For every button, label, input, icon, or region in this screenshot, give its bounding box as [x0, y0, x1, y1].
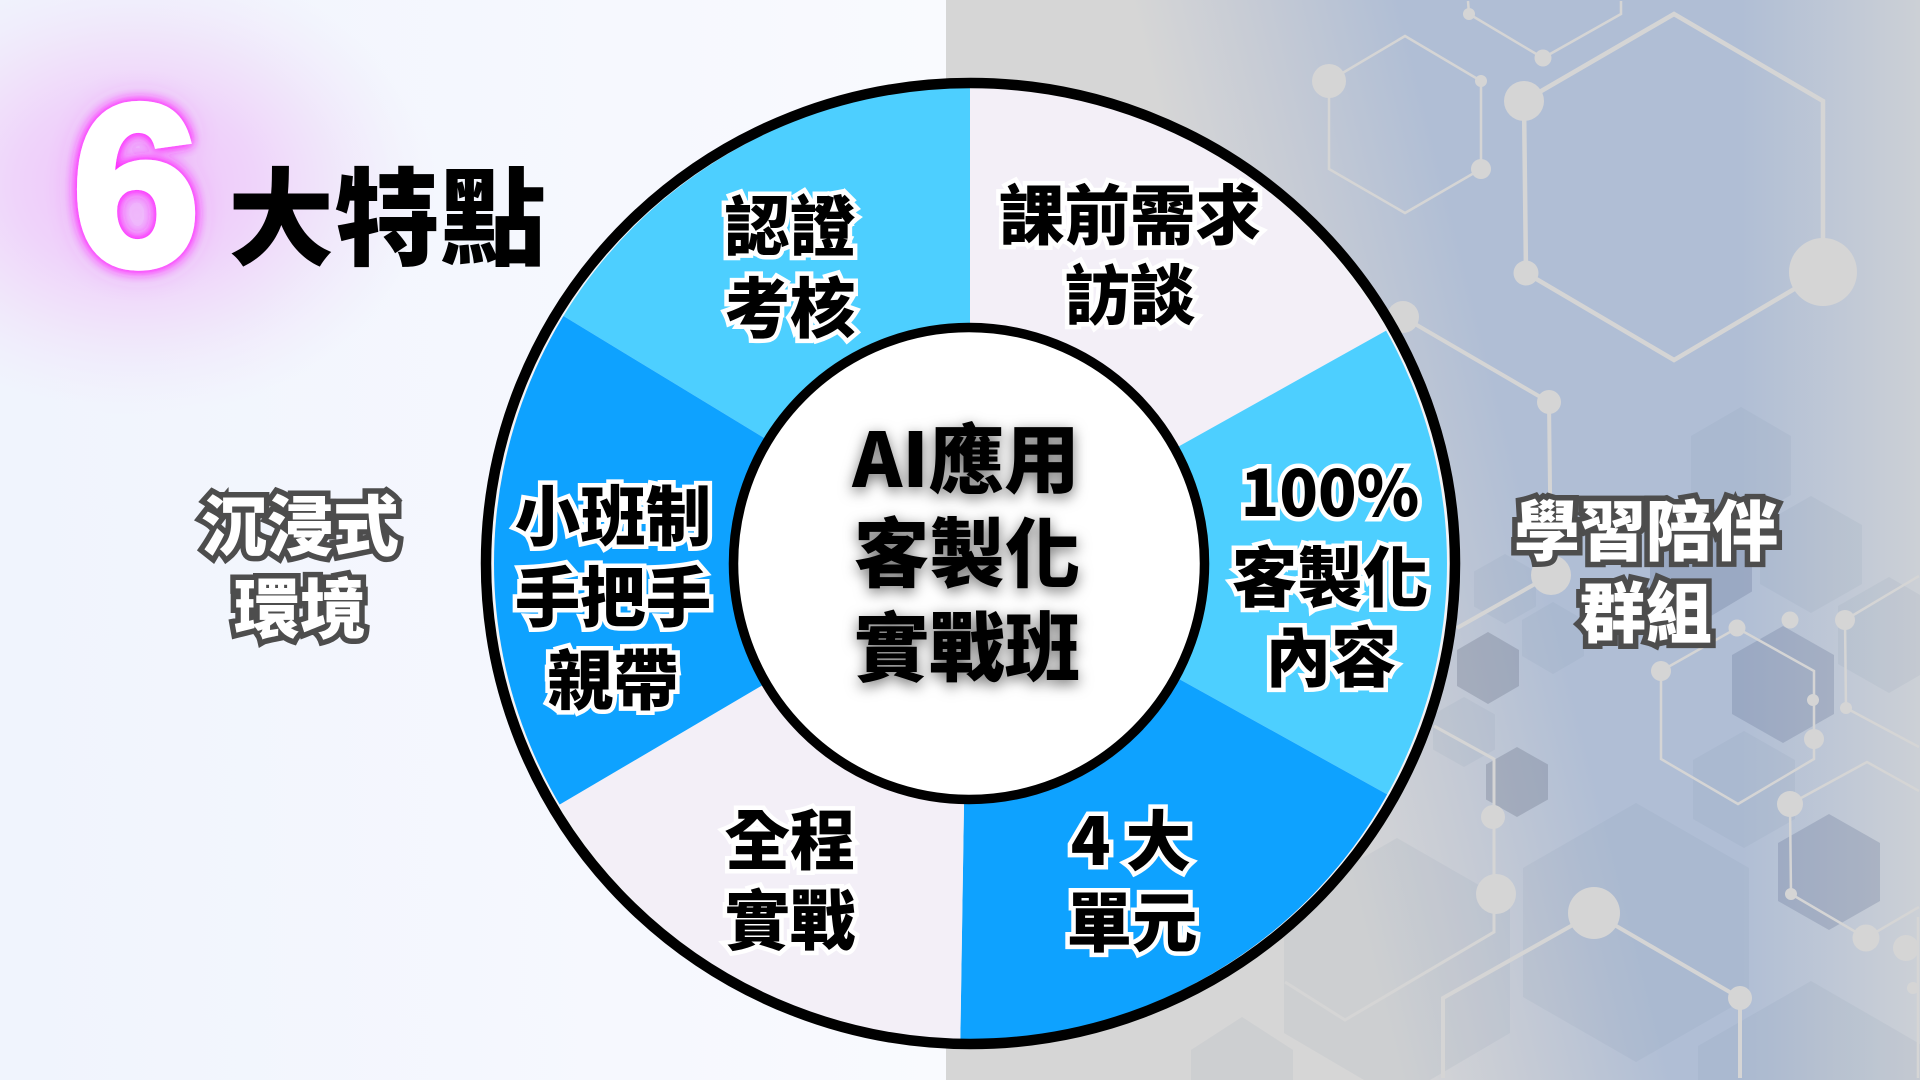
wheel segments — [494, 88, 1447, 1039]
wheel centre circle — [734, 328, 1204, 800]
segment label: 認證考核: 考核 — [724, 256, 856, 351]
title number: 6: 6 — [72, 57, 200, 314]
segment label: 全程實戰 — [724, 788, 856, 963]
segment label: 認證考核 — [724, 174, 856, 351]
title: 大特點: 大特點 — [228, 134, 546, 288]
segment label: 100%客製化內容: 內容 — [1265, 605, 1397, 700]
segment label: 課前需求訪談: 課前需求 — [999, 163, 1261, 258]
segment label: 小班制手把手親帶: 親帶 — [547, 628, 679, 723]
wheel light edge — [490, 87, 1450, 1040]
right background panel — [946, 0, 1920, 1080]
segment label: 認證考核: 認證 — [724, 174, 856, 269]
segment label: 小班制手把手親帶 — [515, 464, 711, 723]
wheel — [440, 70, 1500, 1060]
segment label: 4大單元 — [1066, 789, 1198, 965]
side label: 學習陪伴群組: 學習陪伴 — [1514, 479, 1778, 575]
side label: 沉浸式環境: 沉浸式 — [201, 474, 399, 570]
side label: 沉浸式環境: 環境 — [234, 557, 366, 653]
centre label: AI應用客製化實戰班: 實戰班 — [854, 587, 1080, 697]
side label: 學習陪伴群組 — [1514, 479, 1778, 657]
hexagon tile pattern — [1191, 407, 1920, 1080]
segment label: 全程實戰: 全程 — [724, 788, 856, 883]
side label: 學習陪伴群組: 群組 — [1580, 561, 1712, 657]
title glow halo — [0, 0, 435, 415]
molecule network lines and nodes — [1285, 1, 1919, 1078]
left background panel — [0, 0, 946, 1080]
segment label: 100%客製化內容: 100% — [1241, 443, 1419, 535]
segment label: 全程實戰: 實戰 — [724, 868, 856, 963]
centre label: AI應用客製化實戰班 — [851, 399, 1080, 697]
segment label: 小班制手把手親帶: 小班制 — [515, 464, 711, 559]
segment label: 課前需求訪談 — [999, 163, 1261, 338]
segment label: 4大單元: 單元 — [1066, 870, 1198, 965]
centre label: AI應用客製化實戰班: AI應用 — [851, 399, 1080, 509]
segment label: 4大單元: 4 大 — [1071, 789, 1191, 884]
segment label: 小班制手把手親帶: 手把手 — [515, 545, 711, 640]
segment label: 100%客製化內容 — [1232, 443, 1428, 700]
segment label: 課前需求訪談: 訪談 — [1064, 243, 1196, 338]
side label: 沉浸式環境 — [201, 474, 399, 653]
wheel outer ring — [486, 83, 1455, 1044]
segment label: 100%客製化內容: 客製化 — [1232, 525, 1428, 620]
centre label: AI應用客製化實戰班: 客製化 — [854, 493, 1080, 603]
